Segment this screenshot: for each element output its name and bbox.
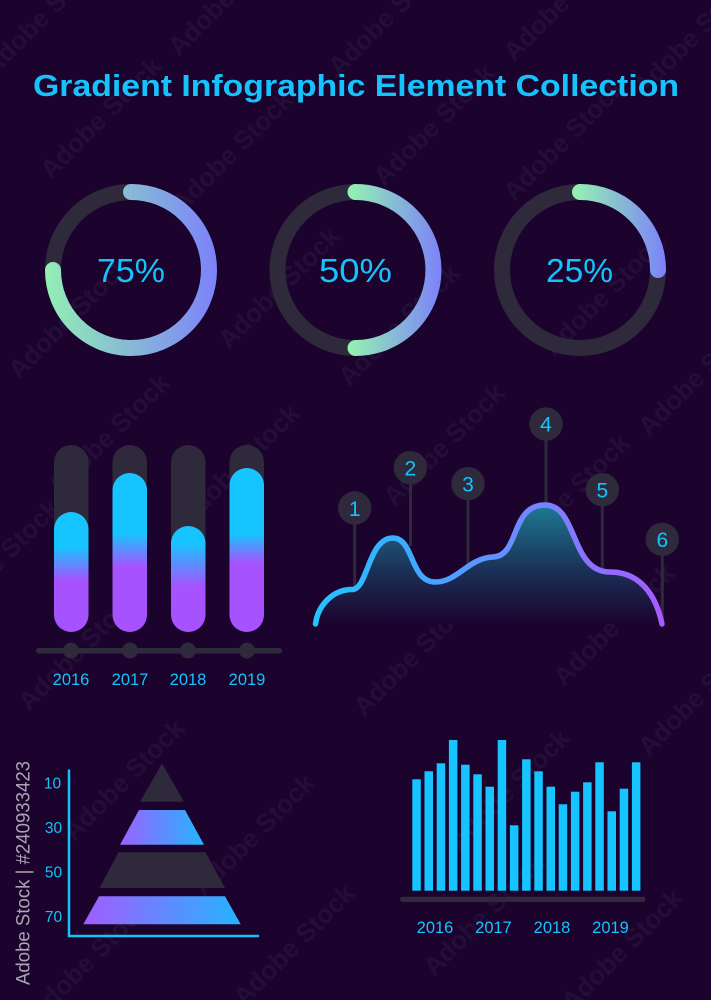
column year labels: 2019	[592, 919, 629, 937]
marker numbers: 6	[656, 529, 668, 552]
marker numbers: 3	[462, 474, 474, 496]
text: Adobe Stock	[497, 72, 631, 206]
area fill	[316, 505, 662, 624]
text: Adobe Stock	[12, 582, 146, 716]
pyramid axis labels: 30	[45, 820, 62, 837]
text: Adobe Stock	[34, 50, 168, 184]
text: Adobe Stock	[172, 397, 306, 531]
year labels	[53, 671, 265, 689]
marker numbers: 4	[540, 414, 552, 436]
donut: 50%	[278, 192, 434, 348]
donut: 50%: 50%	[319, 252, 392, 289]
chart: column bars by year	[400, 740, 646, 937]
column baseline	[400, 897, 646, 902]
text: Adobe Stock	[57, 712, 191, 846]
marker circles	[338, 407, 679, 556]
year labels: 2016	[53, 671, 89, 689]
text: Adobe Stock	[417, 847, 551, 981]
text: Adobe Stock	[165, 84, 299, 218]
column year labels: 2018	[534, 919, 570, 937]
marker numbers: 1	[349, 498, 361, 521]
donut: 25%: 25%	[546, 252, 613, 289]
text: Adobe Stock	[377, 377, 511, 511]
pyramid axis labels: 70	[45, 909, 62, 926]
text: Adobe Stock	[187, 767, 321, 901]
column year labels: 2016	[417, 919, 453, 937]
text: Adobe Stock	[332, 257, 466, 391]
pyramid tier 2	[120, 810, 204, 845]
text: Adobe Stock	[212, 220, 346, 354]
column year labels: 2017	[475, 919, 512, 937]
columns	[412, 740, 640, 891]
pyramid tier 1	[140, 764, 184, 802]
timeline axis	[36, 642, 282, 658]
year labels: 2018	[170, 671, 206, 689]
text: Adobe Stock	[537, 227, 671, 361]
pyramid tier 3	[100, 852, 225, 888]
side credit text: Adobe Stock | #240933423	[14, 761, 34, 985]
text: Adobe Stock	[367, 57, 501, 191]
gradient line	[316, 505, 662, 624]
pyramid axis labels	[44, 776, 62, 926]
pyramid axis labels: 10	[44, 776, 61, 792]
bar fills	[54, 468, 264, 632]
bar tracks	[54, 445, 264, 632]
donut: 25%	[502, 192, 658, 348]
text: Adobe Stock	[347, 587, 481, 721]
pyramid axes	[69, 770, 258, 936]
text: Adobe Stock	[2, 250, 136, 384]
title: Gradient Infographic Element Collection	[33, 68, 679, 103]
year labels: 2017	[112, 671, 148, 689]
marker numbers: 2	[404, 458, 416, 480]
donut: 75%	[53, 192, 209, 348]
pyramid axis labels: 50	[45, 864, 62, 882]
text: Adobe Stock	[442, 722, 576, 856]
chart: pyramid	[44, 764, 258, 936]
marker numbers	[349, 414, 668, 552]
donut: 75%: 75%	[97, 252, 165, 289]
chart: rounded vertical bars by year	[36, 445, 282, 689]
text: Adobe Stock	[42, 367, 176, 501]
pyramid tier 4	[83, 896, 241, 924]
column year labels	[417, 919, 629, 937]
year labels: 2019	[229, 671, 265, 689]
panel: donut progress rings	[53, 192, 658, 348]
marker numbers: 5	[596, 480, 608, 502]
text: Adobe Stock	[502, 427, 636, 561]
text: Adobe Stock	[547, 557, 681, 691]
chart: area line with numbered markers	[316, 407, 679, 624]
marker stems	[355, 424, 662, 622]
